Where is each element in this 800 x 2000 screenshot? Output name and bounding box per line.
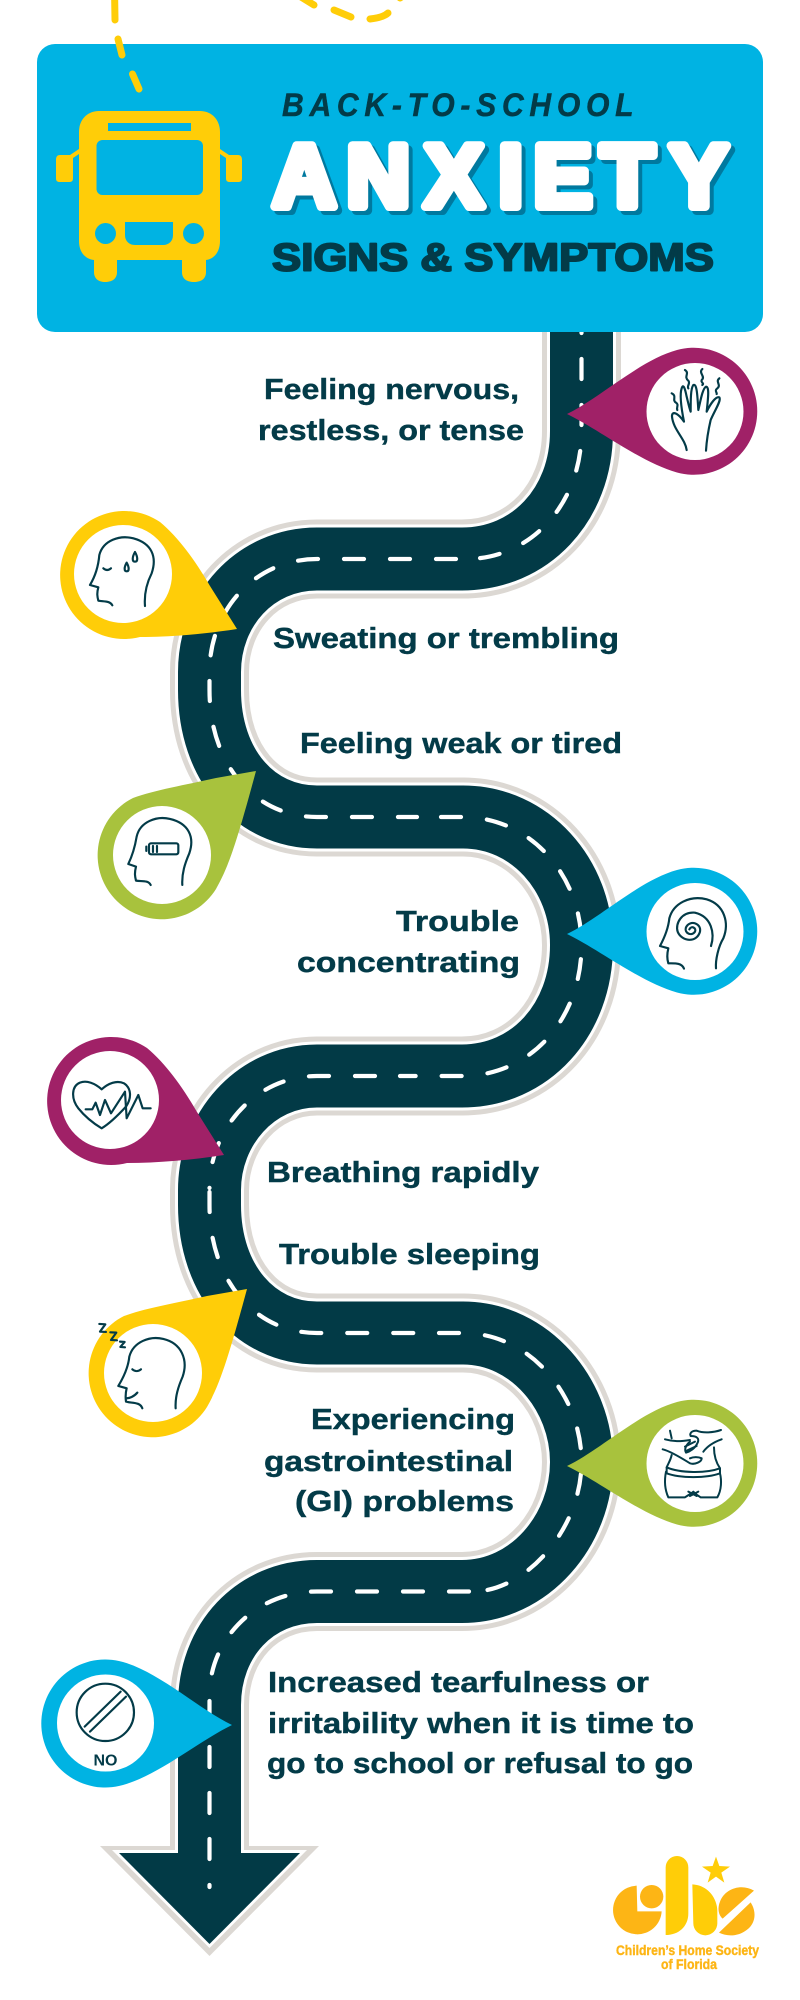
pin: spiral head xyxy=(567,868,757,995)
icon: sweating head xyxy=(90,537,154,606)
text: feeling nervous: restless, or tense xyxy=(258,415,524,447)
icon: prohibition sign xyxy=(77,1684,134,1741)
icon: school bus xyxy=(56,111,242,282)
text: increased tearfulness: go to school or refusal to go xyxy=(267,1748,693,1780)
header banner xyxy=(37,44,763,332)
heading: anxiety: ANXIETY xyxy=(272,126,728,226)
dotted bus route xyxy=(114,0,403,89)
text: feeling nervous xyxy=(258,374,524,447)
text: breathing rapidly: Breathing rapidly xyxy=(267,1157,539,1189)
icon: heartbeat xyxy=(73,1082,151,1128)
logo text: Children’s Home Society xyxy=(616,1943,759,1958)
text: increased tearfulness xyxy=(267,1667,694,1780)
pin: stomach ache xyxy=(567,1400,757,1527)
text: feeling nervous: Feeling nervous, xyxy=(264,374,519,406)
text: feeling weak or tired: Feeling weak or tired xyxy=(300,728,622,760)
icon: low battery head xyxy=(128,818,191,885)
logo text: of Florida xyxy=(661,1957,717,1972)
heading: signs and symptoms: SIGNS & SYMPTOMS xyxy=(272,236,714,280)
text: increased tearfulness: Increased tearfulness or xyxy=(268,1667,649,1699)
heading: back-to-school: BACK-TO-SCHOOL xyxy=(282,87,634,123)
winding road with arrow xyxy=(100,300,582,1956)
icon: spiral head xyxy=(660,898,726,969)
text: gastrointestinal problems xyxy=(264,1404,515,1518)
text: gastrointestinal problems: Experiencing xyxy=(311,1404,515,1436)
icon: shaking hand xyxy=(672,369,720,451)
text: trouble concentrating: concentrating xyxy=(297,947,520,979)
logo text xyxy=(616,1943,759,1972)
text: sweating or trembling: Sweating or trembling xyxy=(273,623,619,655)
pin: hand tremor xyxy=(567,348,757,475)
logo mark xyxy=(613,1856,755,1935)
icon: sleeping head xyxy=(99,1324,185,1408)
text: trouble sleeping: Trouble sleeping xyxy=(279,1239,540,1271)
pin: heartbeat xyxy=(47,1037,224,1165)
heading: anxiety: ANXIETY xyxy=(276,130,732,230)
text: trouble concentrating: Trouble xyxy=(396,906,519,938)
pin: low battery head xyxy=(98,771,256,919)
pin: no sign xyxy=(41,1660,232,1787)
logo: children's home society xyxy=(613,1856,759,1972)
text: trouble concentrating xyxy=(297,906,520,979)
pin: sleeping head xyxy=(89,1289,247,1437)
text: gastrointestinal problems: gastrointestinal xyxy=(264,1446,513,1478)
icon: hands on stomach xyxy=(663,1430,722,1497)
label: no: NO xyxy=(94,1753,118,1770)
pin: sweating head xyxy=(60,511,237,639)
text: gastrointestinal problems: (GI) problems xyxy=(295,1486,514,1518)
text: increased tearfulness: irritability when it is time to xyxy=(268,1708,694,1740)
